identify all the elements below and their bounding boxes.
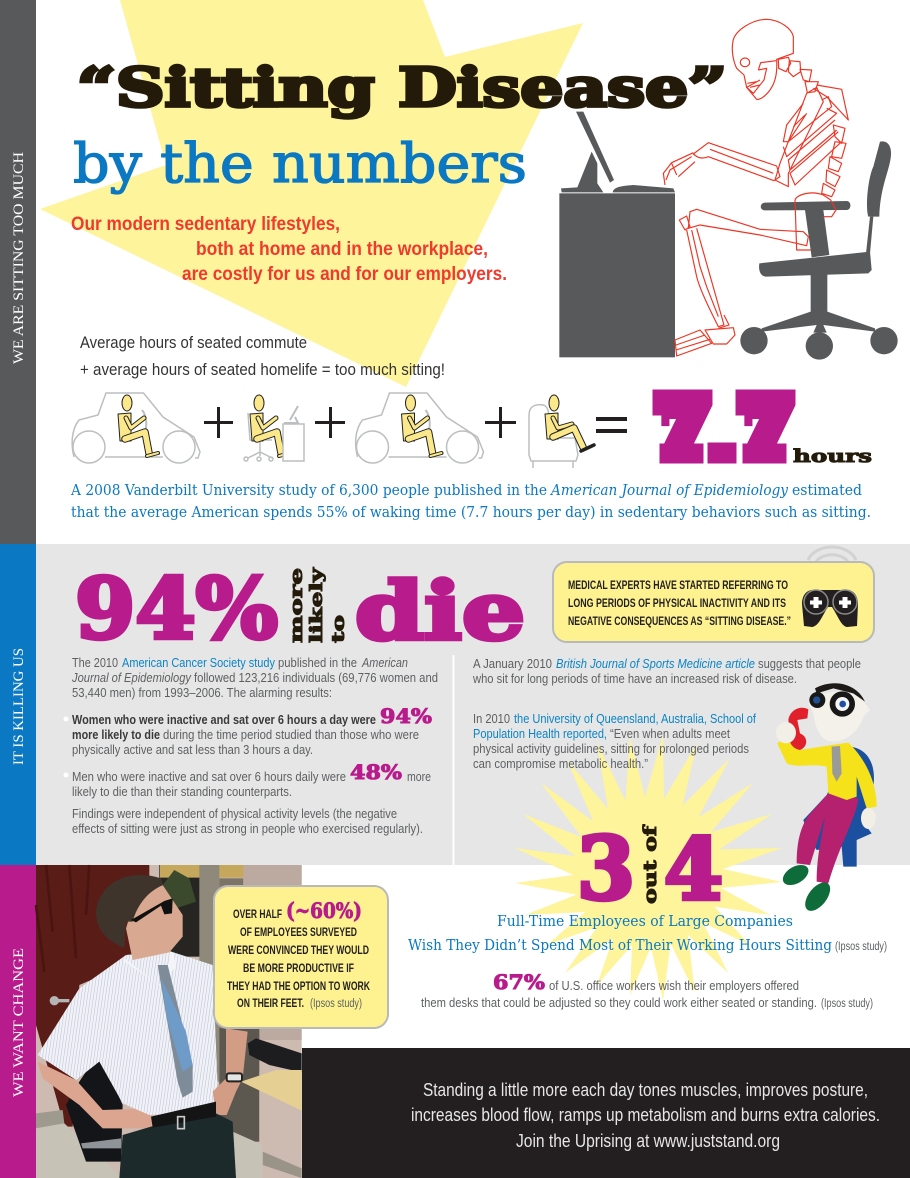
text: men result: likely to die than their standing counterparts.	[72, 784, 292, 799]
text: women result	[64, 704, 432, 757]
sidebar: it is killing us: IT IS KILLING US	[11, 648, 27, 765]
callout: over half of employees: WERE CONVINCED THEY WOULD	[228, 943, 369, 957]
text: Vanderbilt study	[70, 483, 871, 521]
text: men result: Men who were inactive and sat over 6 hours daily were	[72, 769, 346, 784]
text: Vanderbilt study: that the average American spends 55% of waking time (7.7 hours per day) in sedentary behaviors such as sitting.	[71, 505, 871, 521]
heading: 94% more likely to die: to	[329, 615, 349, 643]
text: women result: Women who were inactive and sat over 6 hours a day were	[72, 712, 376, 727]
icon: equals	[596, 417, 627, 433]
text: findings: effects of sitting were just as strong in people who exercised regularly).	[72, 821, 423, 836]
heading: 94% more likely to die: 94%	[75, 560, 278, 658]
text: American Cancer Society study: American Cancer Society study	[122, 655, 275, 670]
text: full-time employees: Full-Time Employees of Large Companies	[497, 914, 793, 930]
icon: plus	[204, 407, 233, 438]
callout: medical experts: LONG PERIODS OF PHYSICAL INACTIVITY AND ITS	[568, 596, 786, 610]
text: 67% of office workers: of U.S. office workers wish their employers offered	[549, 978, 799, 993]
text: British Journal of Sports Medicine: suggests that people	[758, 656, 861, 671]
text: findings	[72, 806, 423, 836]
text: British Journal of Sports Medicine: A January 2010	[473, 656, 552, 671]
text: men result: 48%	[350, 760, 402, 784]
callout: medical experts: NEGATIVE CONSEQUENCES AS “SITTING DISEASE.”	[568, 614, 791, 628]
text: Vanderbilt study: estimated	[792, 483, 862, 499]
callout: over half of employees: THEY HAD THE OPTION TO WORK	[227, 979, 370, 993]
icon: seated commute car	[356, 393, 484, 463]
illustration: desk, monitor and chair	[559, 112, 898, 360]
text: University of Queensland: can compromise metabolic health.”	[473, 756, 648, 771]
text: British Journal of Sports Medicine: British Journal of Sports Medicine article	[556, 656, 755, 671]
title: Sitting Disease: “Sitting Disease”	[77, 57, 727, 119]
text: 67% of office workers: 67%	[493, 970, 545, 994]
banner: join the uprising: Join the Uprising at www.juststand.org	[516, 1131, 780, 1151]
starburst	[515, 735, 782, 1000]
panel: it is killing us background	[36, 544, 910, 865]
big number: 7.7 hours: 7	[657, 392, 709, 477]
sidebar: we are sitting too much	[0, 0, 36, 544]
text: 67% of office workers: them desks that could be adjusted so they could work either seated or standing.	[421, 995, 817, 1010]
icon: game controller	[802, 590, 858, 627]
sidebar: we want change: WE WANT CHANGE	[11, 948, 27, 1097]
text: University of Queensland: In 2010	[473, 711, 510, 726]
text: British Journal of Sports Medicine	[472, 656, 861, 686]
text: University of Queensland: the University of Queensland, Australia, School of	[514, 711, 756, 726]
text: Vanderbilt study: American Journal of Epidemiology	[549, 483, 789, 499]
callout: over half of employees: (Ipsos study)	[310, 998, 362, 1010]
callout: medical experts: MEDICAL EXPERTS HAVE STARTED REFERRING TO	[568, 578, 788, 592]
callout: over half of employees: (~60%)	[286, 898, 362, 923]
text: American Cancer Society study: followed 123,216 individuals (69,776 women and	[194, 670, 438, 685]
illustration: red skeleton	[663, 19, 848, 356]
sidebar: we want change	[0, 865, 36, 1178]
text: American Cancer Society study	[71, 655, 438, 700]
text: women result: 94%	[380, 704, 432, 728]
big number: 7.7 hours: hours	[793, 446, 872, 467]
heading: 94% more likely to die: more	[287, 568, 307, 643]
subtitle: modern sedentary lifestyles: both at home and in the workplace,	[196, 239, 488, 260]
big number: 3 out of 4: 4	[664, 820, 723, 919]
text: 67% of office workers	[421, 970, 873, 1010]
icon: plus	[485, 407, 516, 438]
subtitle: modern sedentary lifestyles: are costly for us and for our employers.	[182, 264, 507, 285]
icon: sofa sitter	[529, 395, 594, 468]
icon: desk worker	[244, 395, 304, 461]
big number: 3 out of 4: out of	[640, 824, 661, 904]
text: University of Queensland: Population Health reported,	[473, 726, 607, 741]
text: British Journal of Sports Medicine: who sit for long periods of time have an increased risk of disease.	[472, 671, 797, 686]
subtitle: modern sedentary lifestyles: Our modern sedentary lifestyles,	[71, 214, 340, 235]
text: American Cancer Society study: American	[361, 655, 408, 670]
text: seated hours intro: Average hours of seated commute	[80, 333, 307, 352]
text: University of Queensland	[473, 711, 756, 771]
callout: medical experts	[553, 547, 874, 642]
big number: 7.7 hours: .	[709, 405, 735, 475]
yellow star behind title	[40, 0, 583, 387]
big number: 7.7 hours	[653, 390, 872, 477]
icon: plus	[315, 407, 345, 438]
text: University of Queensland: physical activity guidelines, sitting for prolonged periods	[473, 741, 749, 756]
big number: 3 out of 4: 3	[577, 819, 635, 920]
sidebar: it is killing us	[0, 544, 36, 865]
text: full-time employees: (Ipsos study)	[835, 941, 887, 953]
heading: 94% more likely to die: likely	[307, 566, 327, 643]
text: women result: physically active and sat less than 3 hours a day.	[72, 742, 313, 757]
big number: 3 out of 4	[577, 819, 723, 920]
callout: over half of employees	[214, 886, 388, 1028]
text: women result: during the time period studied than those who were	[163, 727, 419, 742]
text: seated hours intro	[80, 333, 445, 379]
text: 67% of office workers: (Ipsos study)	[821, 998, 873, 1010]
icon: seated commute car	[72, 393, 200, 463]
text: American Cancer Society study: Journal of Epidemiology	[71, 670, 192, 685]
text: seated hours intro: + average hours of seated homelife = too much sitting!	[80, 360, 445, 379]
callout: over half of employees: OVER HALF	[233, 907, 282, 921]
text: American Cancer Society study: The 2010	[72, 655, 118, 670]
text: women result: more likely to die	[72, 727, 160, 742]
illustration: clay man on phone	[776, 683, 877, 915]
banner: join the uprising	[302, 1048, 910, 1178]
subtitle: modern sedentary lifestyles	[71, 214, 507, 285]
text: findings: Findings were independent of physical activity levels (the negative	[72, 806, 397, 821]
text: Vanderbilt study: A 2008 Vanderbilt University study of 6,300 people published in the	[70, 483, 547, 499]
photo: man standing at desk	[36, 865, 302, 1178]
big number: 7.7 hours: 7	[740, 392, 792, 477]
text: men result: more	[407, 769, 431, 784]
callout: over half of employees: ON THEIR FEET.	[237, 996, 304, 1010]
text: men result	[64, 760, 431, 799]
callout: over half of employees: OF EMPLOYEES SURVEYED	[240, 925, 357, 939]
text: American Cancer Society study: 53,440 men) from 1993–2006. The alarming results:	[72, 685, 332, 700]
sidebar: we are sitting too much: WE ARE SITTING TOO MUCH	[11, 152, 27, 364]
text: University of Queensland: “Even when adults meet	[610, 726, 730, 741]
callout: over half of employees: BE MORE PRODUCTIVE IF	[243, 961, 354, 975]
text: American Cancer Society study: published in the	[278, 655, 357, 670]
text: full-time employees	[408, 914, 887, 954]
heading: 94% more likely to die	[75, 560, 525, 658]
text: full-time employees: Wish They Didn’t Spend Most of Their Working Hours Sitting	[408, 938, 832, 954]
heading: 94% more likely to die: die	[355, 564, 525, 658]
title: by the numbers: by the numbers	[73, 132, 527, 195]
